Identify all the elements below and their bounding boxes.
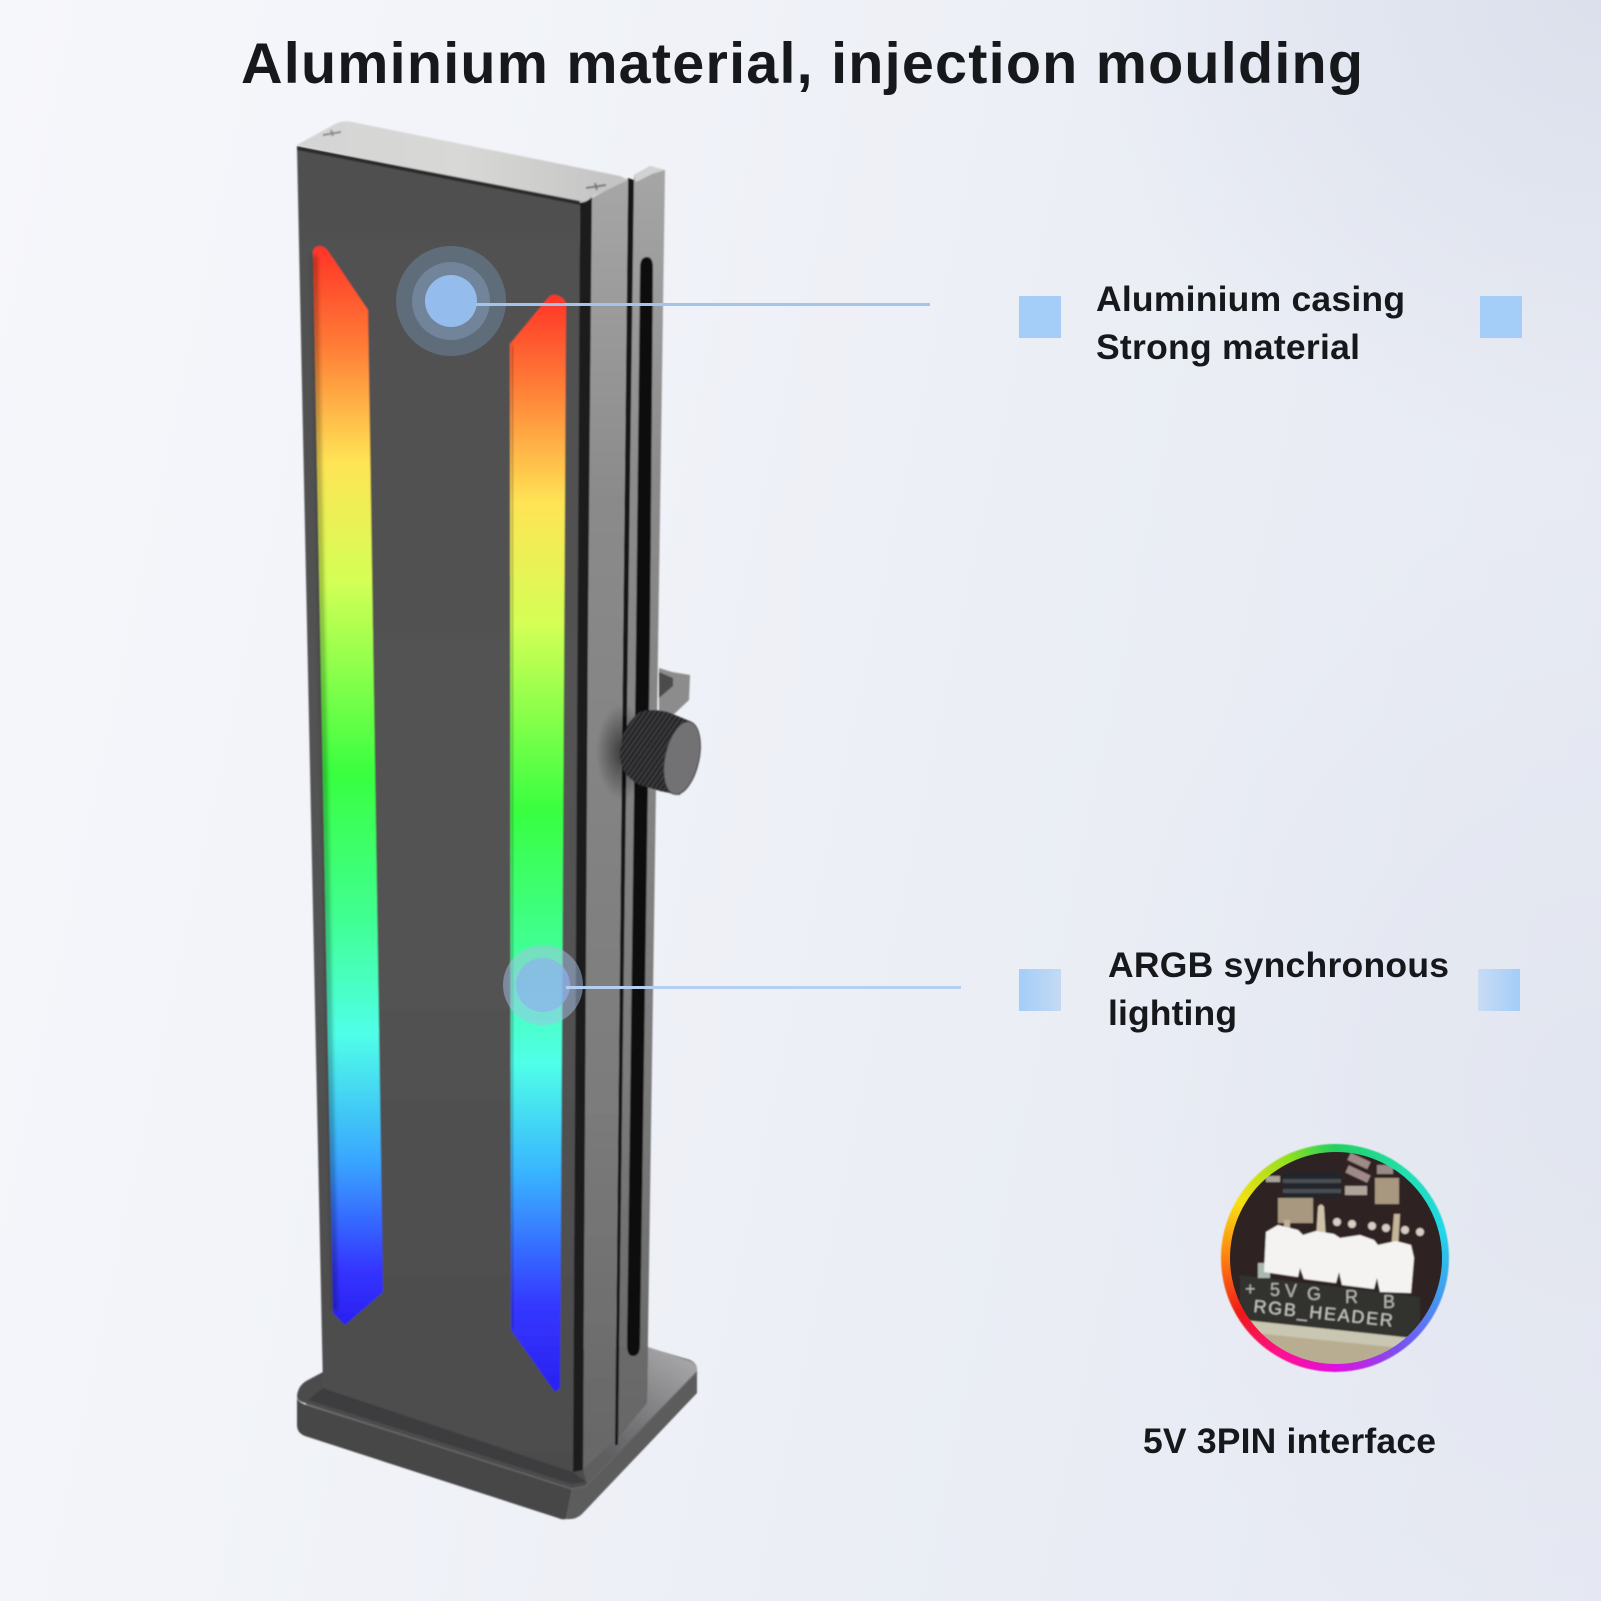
marker square right bbox=[1478, 969, 1520, 1011]
rainbow ring around interface photo bbox=[1221, 1144, 1449, 1372]
marker square left bbox=[1019, 296, 1061, 338]
board edge bbox=[1250, 1320, 1406, 1364]
photo: 5V 3-pin RGB header: RGB_HEADER bbox=[1252, 1296, 1394, 1332]
white connector bbox=[1258, 1263, 1270, 1278]
callout text: ARGB lighting bbox=[1019, 945, 1520, 1033]
thumb screw and bracket bbox=[596, 668, 706, 800]
casing label: Aluminium casing bbox=[1096, 279, 1405, 319]
callout marker: ARGB lighting bbox=[503, 945, 961, 1025]
top cap with screws bbox=[297, 121, 628, 205]
lighting label: lighting bbox=[1108, 993, 1237, 1033]
marker square left bbox=[1019, 969, 1061, 1011]
base plate bbox=[297, 1345, 697, 1519]
title: Aluminium material, injection moulding bbox=[241, 32, 1363, 96]
photo: 5V 3-pin RGB header bbox=[1230, 1152, 1442, 1364]
rear rail with slot bbox=[615, 166, 665, 1445]
front face bbox=[297, 148, 580, 1472]
callout text: aluminium casing bbox=[1019, 279, 1522, 367]
interface label: 5V 3PIN interface bbox=[1143, 1421, 1436, 1461]
pins bbox=[1316, 1204, 1326, 1240]
right RGB light bar bbox=[510, 295, 566, 1392]
callout marker: aluminium casing bbox=[396, 246, 930, 356]
photo: 5V 3-pin RGB header: + 5V G R B bbox=[1245, 1279, 1395, 1312]
ARGB label: ARGB synchronous bbox=[1108, 945, 1449, 985]
side panel bbox=[573, 178, 628, 1472]
top components bbox=[1283, 1172, 1341, 1198]
label plate bbox=[1240, 1276, 1420, 1336]
solder dots bbox=[1333, 1218, 1341, 1226]
material label: Strong material bbox=[1096, 327, 1360, 367]
product: ARGB graphics card support stand bbox=[297, 121, 706, 1519]
left RGB light bar bbox=[313, 246, 383, 1325]
marker square right bbox=[1480, 296, 1522, 338]
